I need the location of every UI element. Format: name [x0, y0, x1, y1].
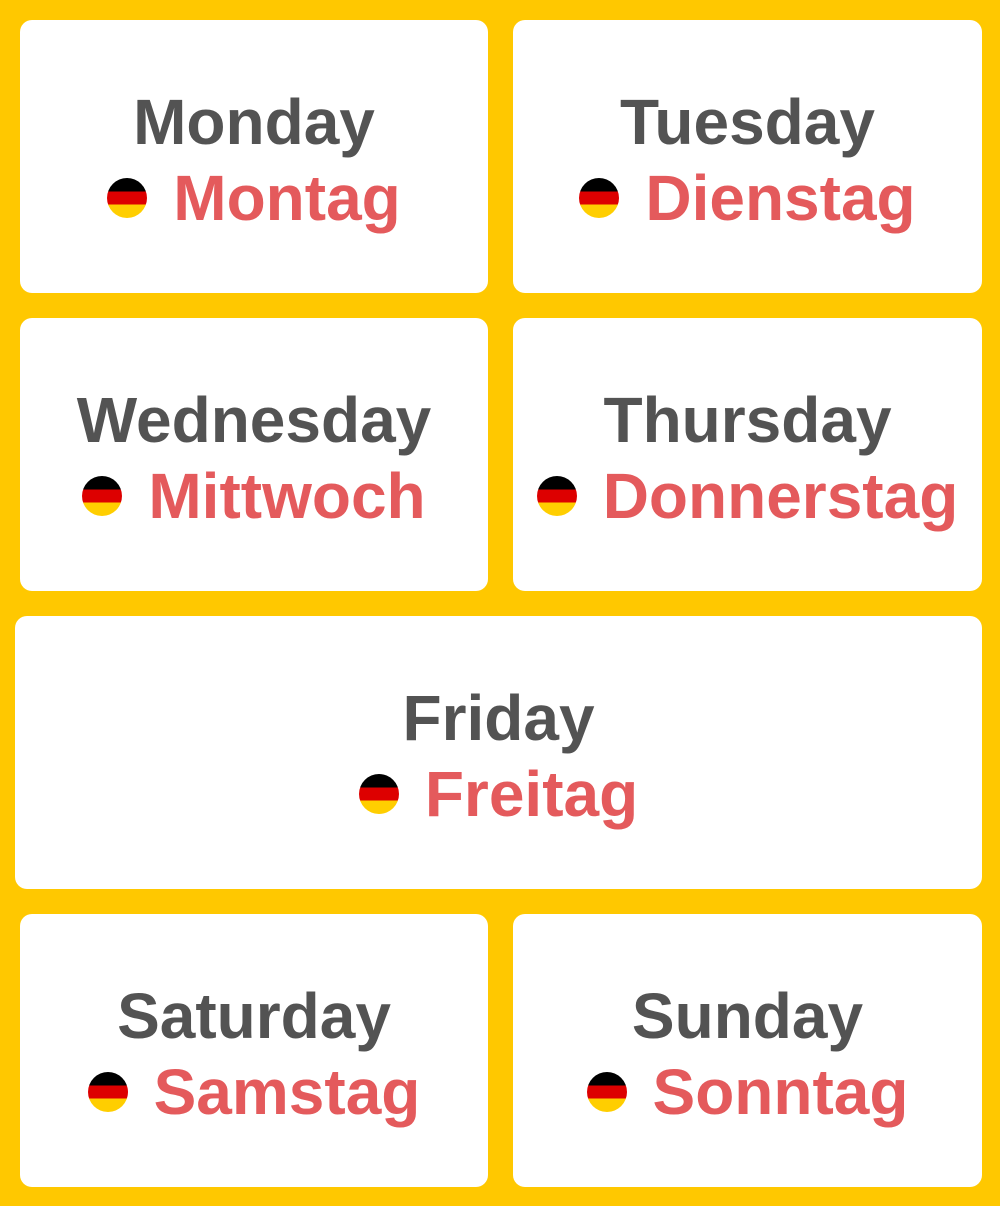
- english: Thursday: Thursday: [603, 384, 892, 456]
- card: Saturday: [20, 914, 488, 1187]
- german: Montag: Montag: [173, 162, 401, 234]
- english: Sunday: Sunday: [632, 980, 863, 1052]
- english: Wednesday: Wednesday: [77, 384, 431, 456]
- german: Mittwoch: Mittwoch: [148, 460, 426, 532]
- card: Sunday: [513, 914, 982, 1187]
- english: Tuesday: Tuesday: [620, 86, 875, 158]
- german: Freitag: Freitag: [425, 758, 638, 830]
- german: Sonntag: Sonntag: [653, 1056, 908, 1128]
- card: Monday: [20, 20, 488, 293]
- english: Monday: Monday: [133, 86, 375, 158]
- english: Saturday: Saturday: [117, 980, 391, 1052]
- german: Dienstag: Dienstag: [645, 162, 916, 234]
- german: Samstag: Samstag: [154, 1056, 420, 1128]
- card: Friday: [15, 616, 982, 889]
- card: Thursday: [513, 318, 982, 591]
- card: Tuesday: [513, 20, 982, 293]
- german: Donnerstag: Donnerstag: [603, 460, 958, 532]
- card: Wednesday: [20, 318, 488, 591]
- english: Friday: Friday: [402, 682, 595, 754]
